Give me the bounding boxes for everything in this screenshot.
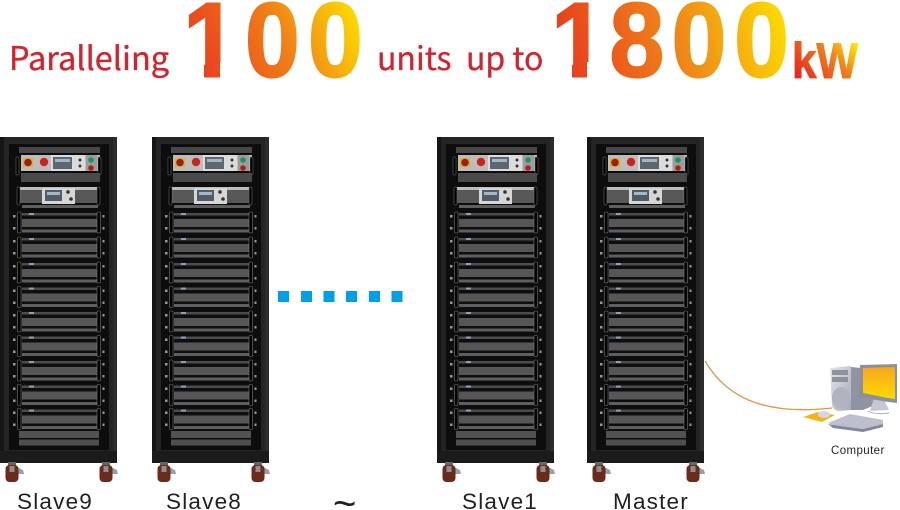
title unit: kW: kW bbox=[792, 33, 859, 89]
monitor bbox=[859, 364, 897, 403]
label: Computer: Computer bbox=[831, 445, 885, 457]
title text: up to: up to bbox=[466, 34, 543, 80]
monitor stand bbox=[870, 398, 889, 411]
dotted continuation marker bbox=[278, 291, 402, 302]
rack: Slave1 bbox=[437, 137, 555, 482]
tower bbox=[851, 367, 875, 410]
title text: units: units bbox=[377, 34, 451, 80]
title bbox=[9, 0, 859, 99]
mouse pad and mouse bbox=[803, 412, 835, 422]
rack: Master bbox=[587, 137, 705, 482]
rack: Slave8 bbox=[152, 137, 270, 482]
rack: Slave9 bbox=[0, 137, 118, 482]
keyboard bbox=[828, 414, 883, 429]
title text: Paralleling: Paralleling bbox=[9, 33, 169, 80]
connection cable bbox=[705, 361, 832, 410]
icon: computer bbox=[803, 364, 897, 432]
